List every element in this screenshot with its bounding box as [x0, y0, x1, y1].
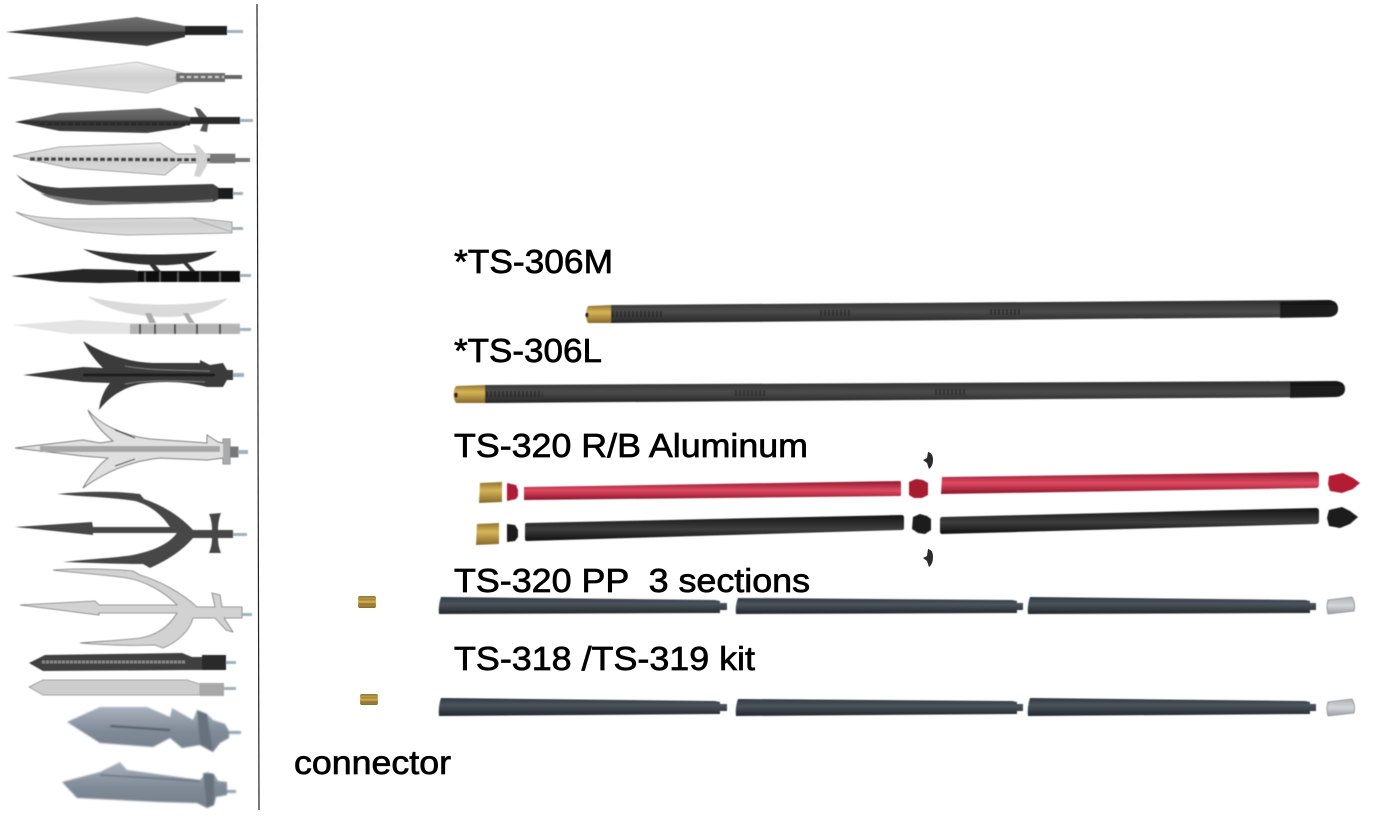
label: TS-320 PP 3 sections: TS-320 PP 3 sections	[454, 562, 810, 599]
blade 4 light sword with guard	[13, 143, 250, 177]
label: TS-320 R/B Aluminum: TS-320 R/B Aluminum	[454, 427, 808, 464]
icon: top set screw	[923, 452, 933, 469]
label: TS-306M: *TS-306M	[454, 243, 613, 280]
blade 8 light double blade	[12, 296, 251, 334]
blade 15 blue grey knife	[67, 707, 241, 752]
label: TS-318 / TS-319 kit: TS-318 /TS-319 kit	[454, 640, 755, 677]
shaft: TS-320 red aluminum	[479, 472, 1360, 503]
label: connector: connector	[294, 744, 451, 781]
blade 5 dark sabre	[16, 174, 243, 205]
label: TS-306L: *TS-306L	[454, 332, 602, 369]
shaft: TS-320 black aluminum	[476, 507, 1358, 545]
blade 12 light trident	[20, 569, 252, 648]
divider line	[257, 4, 259, 810]
blade 10 light swept prongs	[15, 410, 248, 488]
panel: blade column	[6, 17, 253, 808]
blade 1 dark leaf	[6, 17, 243, 46]
connector: TS-320 PP	[358, 596, 376, 608]
blade 9 dark swept prongs	[23, 341, 244, 410]
blade 3 dark sword with guard	[15, 107, 253, 133]
blade 6 light sabre	[16, 212, 243, 235]
shaft: TS-318 kit sections	[439, 698, 1355, 716]
icon: bottom set screw	[923, 549, 933, 567]
shaft: TS-306L	[454, 381, 1345, 403]
blade 11 dark trident	[15, 492, 247, 568]
blade 7 dark double blade	[11, 249, 251, 283]
blade 14 light short sword	[29, 680, 236, 696]
shaft: TS-320 PP sections	[439, 597, 1355, 614]
blade 2 light leaf	[8, 62, 242, 93]
blade 13 dark short sword	[29, 653, 236, 671]
shaft: TS-306M	[585, 300, 1338, 323]
connector: TS-318 kit	[360, 694, 378, 705]
blade 16 grey tanto	[62, 762, 236, 808]
